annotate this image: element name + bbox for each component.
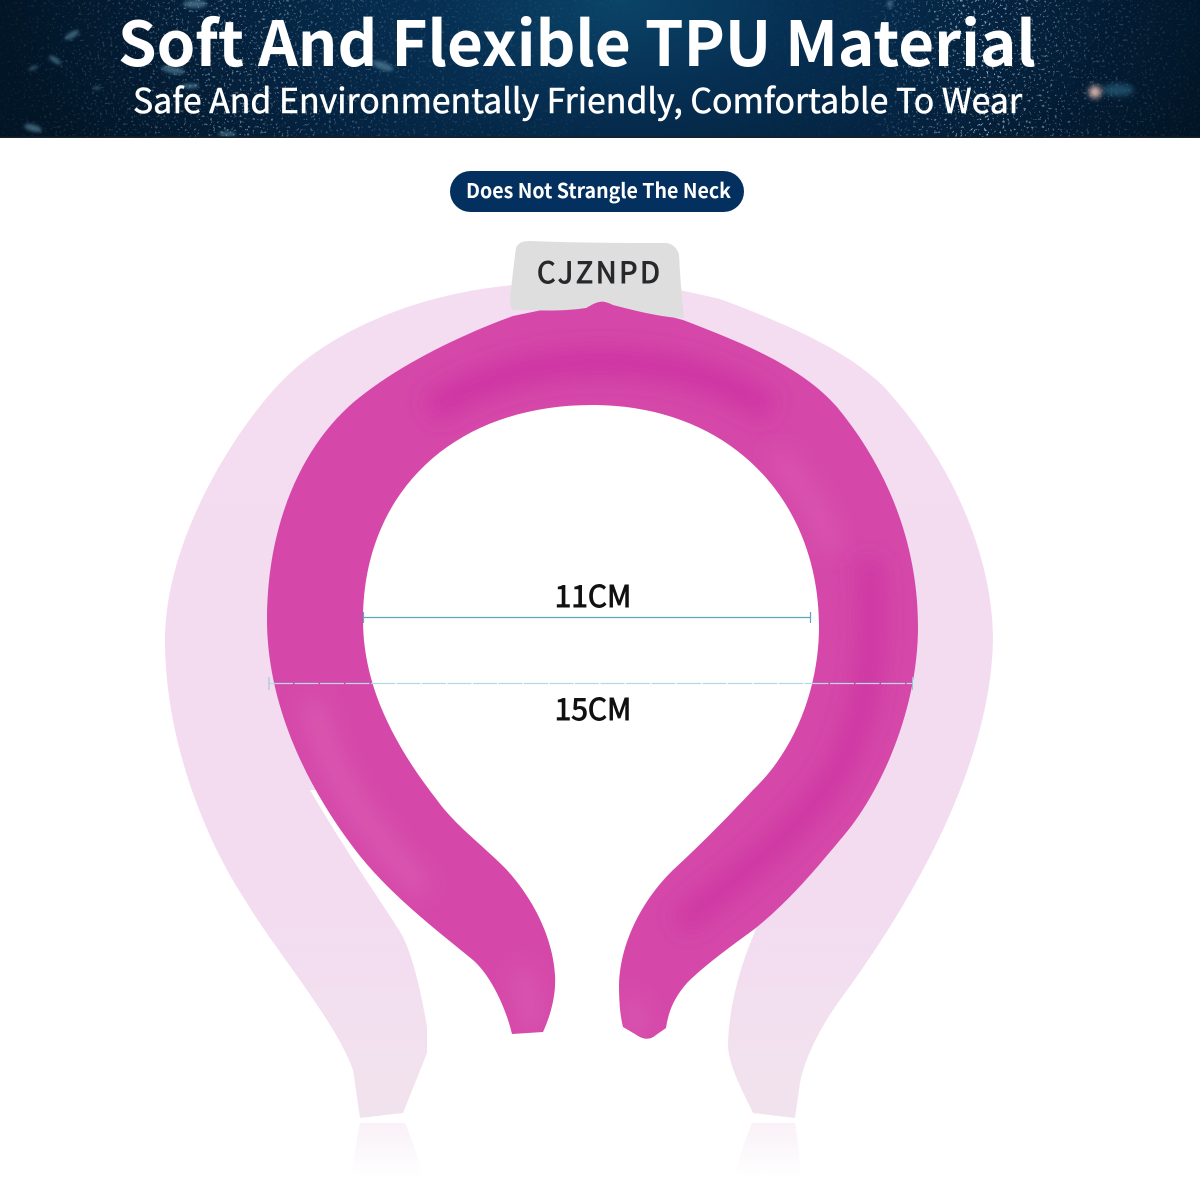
- brand name: CJZNPD: [537, 250, 660, 292]
- magenta neck ring: [267, 298, 918, 1039]
- pale ring reflection: [352, 1123, 800, 1178]
- subtitle: Safe And Environmentally Friendly, Comfortable To Wear: [133, 74, 1023, 123]
- 15cm measurement: 15CM: [555, 685, 631, 729]
- 15cm measurement: [269, 677, 913, 729]
- 11cm measurement: [364, 572, 811, 623]
- header banner: [0, 0, 1200, 138]
- pill label: [450, 171, 744, 212]
- expanded pale neck ring: [165, 285, 993, 1118]
- pill label: Does Not Strangle The Neck: [466, 174, 732, 204]
- 11cm measurement: 11CM: [555, 572, 631, 616]
- logo tag: [510, 241, 684, 318]
